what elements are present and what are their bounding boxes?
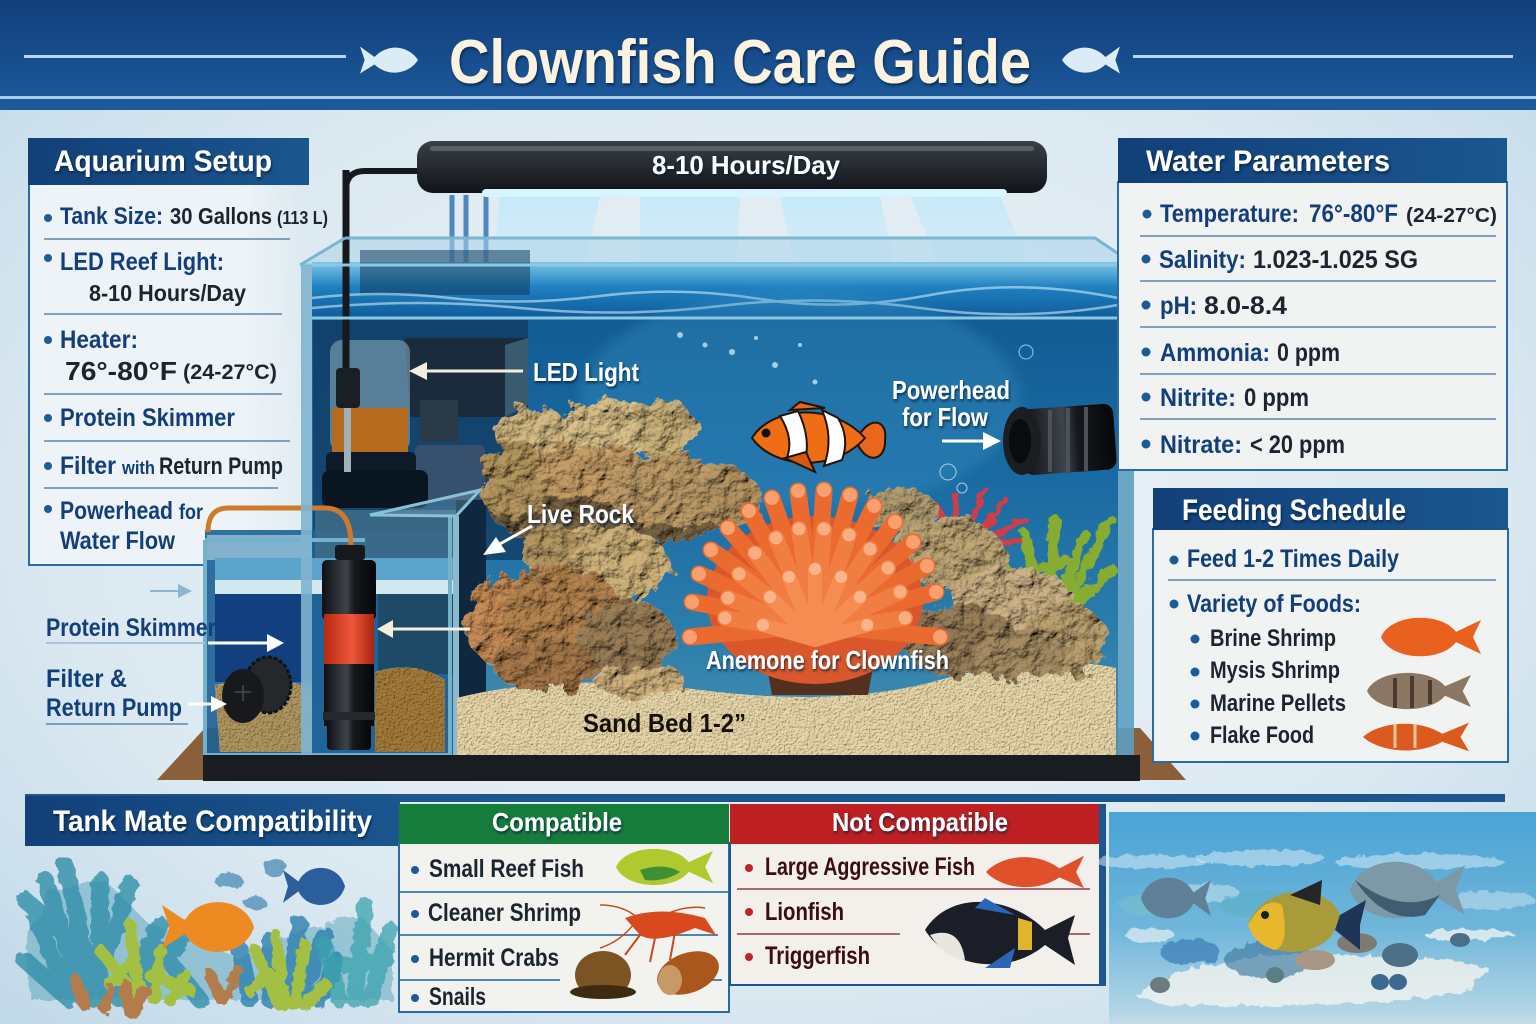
icon: snail bbox=[651, 943, 725, 1003]
parameters list: 8.0-8.4 bbox=[1204, 292, 1287, 320]
setup list: Water Flow bbox=[60, 527, 175, 555]
parameters list: (24-27°C) bbox=[1406, 205, 1497, 227]
compatible list: Hermit Crabs bbox=[429, 944, 559, 972]
return pump body bbox=[322, 545, 376, 750]
clownfish bbox=[752, 402, 885, 472]
parameters list: 76°-80°F bbox=[1309, 200, 1398, 228]
parameters list: Ammonia: bbox=[1160, 339, 1270, 367]
feeding list: Variety of Foods: bbox=[1187, 590, 1361, 618]
label: live rock: Live Rock bbox=[527, 499, 634, 529]
parameters list: Nitrite: bbox=[1160, 384, 1236, 412]
wooden table bbox=[157, 728, 1186, 780]
illustration: seascape with fish bbox=[1095, 812, 1536, 1024]
setup list: Heater: bbox=[60, 326, 138, 354]
arrow: protein skimmer bbox=[46, 634, 284, 652]
panel: tank mate heading bbox=[25, 796, 400, 846]
not compatible list: Lionfish bbox=[765, 898, 844, 926]
glass edges bbox=[300, 238, 1135, 772]
sump bbox=[205, 490, 486, 755]
feeding list: Mysis Shrimp bbox=[1210, 657, 1340, 684]
illustration: coral reef bbox=[25, 859, 392, 1012]
header banner bbox=[0, 0, 1536, 110]
setup list: with bbox=[121, 458, 155, 478]
icon: faint fish bbox=[1141, 878, 1211, 918]
icon: cleaner shrimp bbox=[600, 905, 716, 962]
icon: yellow fish bbox=[1248, 880, 1366, 952]
heading: compatible: Compatible bbox=[492, 807, 622, 837]
setup list: (24-27°C) bbox=[183, 361, 277, 384]
live rock front cluster bbox=[465, 524, 686, 698]
icon: right header fish bbox=[1062, 46, 1120, 74]
heading: not compatible: Not Compatible bbox=[832, 807, 1008, 837]
coral bbox=[925, 490, 1112, 600]
setup list: (113 L) bbox=[277, 208, 328, 228]
bubbles bbox=[677, 332, 1033, 493]
feeding list: Marine Pellets bbox=[1210, 690, 1346, 717]
callouts bbox=[46, 357, 1010, 738]
label: filter and return pump: Return Pump bbox=[46, 694, 182, 722]
icon: small reef fish bbox=[616, 849, 713, 885]
panel: not compatible bbox=[730, 804, 1106, 986]
heading: water parameters: Water Parameters bbox=[1146, 145, 1390, 178]
feeding list bbox=[1168, 545, 1496, 749]
heading: aquarium setup: Aquarium Setup bbox=[54, 145, 272, 178]
compatible list: Cleaner Shrimp bbox=[428, 899, 581, 927]
heading: feeding schedule: Feeding Schedule bbox=[1182, 494, 1406, 527]
parameters list: Nitrate: bbox=[1160, 431, 1242, 459]
heading: water parameters bbox=[1118, 138, 1507, 183]
icon: flake food fish bbox=[1363, 723, 1469, 751]
setup list: 30 Gallons bbox=[170, 203, 272, 229]
parameters list: 0 ppm bbox=[1244, 384, 1309, 412]
feeding list: Brine Shrimp bbox=[1210, 625, 1336, 652]
label: powerhead: Powerhead bbox=[892, 375, 1010, 405]
parameters list bbox=[1140, 200, 1497, 459]
compatible list: Small Reef Fish bbox=[429, 855, 584, 883]
parameters list: Temperature: bbox=[1160, 200, 1299, 228]
label: LED light: LED Light bbox=[533, 357, 639, 387]
panel: water parameters bbox=[1118, 138, 1507, 470]
pump wheel bbox=[222, 657, 291, 723]
label: powerhead bbox=[892, 375, 1010, 432]
arrow: powerhead bbox=[942, 432, 1001, 450]
setup list: Protein Skimmer bbox=[60, 404, 235, 432]
not compatible list: Triggerfish bbox=[765, 942, 870, 970]
anemone base bbox=[762, 626, 878, 695]
LED reef light fixture bbox=[417, 141, 1047, 290]
return pump hose bbox=[208, 508, 351, 545]
label: sand bed: Sand Bed 1-2” bbox=[583, 708, 746, 738]
panel: compatible bbox=[399, 804, 729, 1012]
setup list: Tank Size: bbox=[60, 203, 163, 230]
setup list: for bbox=[179, 501, 203, 524]
setup list: 8-10 Hours/Day bbox=[89, 280, 246, 306]
light label: 8-10 Hours/Day bbox=[652, 150, 841, 180]
setup list: LED Reef Light: bbox=[60, 248, 224, 276]
anemone bbox=[690, 490, 940, 684]
icon: mysis shrimp fish bbox=[1367, 673, 1471, 709]
tank stand bbox=[203, 755, 1140, 781]
heading: feeding schedule bbox=[1153, 488, 1508, 530]
panel: aquarium setup bbox=[28, 138, 328, 566]
faint arrow bbox=[150, 584, 192, 598]
setup list: Powerhead bbox=[60, 497, 173, 525]
skimmer compartment equipment bbox=[313, 170, 528, 560]
feeding list: Flake Food bbox=[1210, 722, 1314, 749]
setup list: Filter bbox=[60, 452, 116, 480]
arrow: pump bbox=[377, 620, 470, 638]
panel: feeding schedule bbox=[1153, 488, 1508, 762]
feeding list: Feed 1-2 Times Daily bbox=[1187, 545, 1399, 573]
icon: dark blue fish bbox=[283, 868, 345, 905]
tank contents bbox=[457, 400, 1117, 755]
label: filter and return pump: Filter & bbox=[46, 665, 127, 693]
setup list: 76°-80°F bbox=[65, 356, 177, 386]
aquarium tank back and water bbox=[300, 238, 1135, 755]
light power cord bbox=[346, 171, 417, 345]
sand bed bbox=[457, 662, 1116, 755]
arrow: live rock bbox=[483, 526, 532, 555]
arrow: LED light bbox=[409, 362, 523, 380]
icon: large aggressive fish bbox=[986, 856, 1084, 888]
heading: aquarium setup bbox=[28, 138, 309, 185]
powerhead bbox=[1003, 403, 1117, 476]
not compatible list bbox=[745, 853, 975, 970]
label: powerhead: for Flow bbox=[902, 402, 989, 432]
compatible list bbox=[411, 855, 584, 1011]
parameters list: < 20 ppm bbox=[1250, 431, 1345, 459]
icon: striped fish bbox=[1350, 862, 1465, 918]
parameters list: Salinity: bbox=[1159, 246, 1246, 274]
compatible list: Snails bbox=[429, 983, 486, 1011]
arrow: filter pump bbox=[188, 696, 227, 712]
top border of compatibility band bbox=[25, 794, 1505, 802]
label: filter and return pump bbox=[46, 665, 188, 724]
setup list: Return Pump bbox=[159, 453, 283, 480]
not compatible list: Large Aggressive Fish bbox=[765, 853, 975, 881]
setup list bbox=[44, 203, 328, 555]
panel: tank mate heading: Tank Mate Compatibility bbox=[53, 805, 372, 838]
label: protein skimmer: Protein Skimmer bbox=[46, 614, 216, 642]
icon: hermit crab bbox=[570, 951, 636, 999]
parameters list: pH: bbox=[1160, 292, 1197, 320]
icon: left header fish bbox=[360, 46, 418, 74]
icon: orange reef fish bbox=[162, 902, 254, 952]
pebbles bbox=[1150, 933, 1470, 993]
parameters list: 0 ppm bbox=[1277, 339, 1340, 367]
icon: brine shrimp fish bbox=[1381, 618, 1481, 656]
icon: small blue fish bbox=[214, 859, 287, 910]
title: Clownfish Care Guide bbox=[449, 28, 1031, 97]
live rock back cluster bbox=[479, 400, 1107, 679]
label: anemone: Anemone for Clownfish bbox=[706, 645, 949, 675]
icon: triggerfish bbox=[925, 898, 1075, 968]
parameters list: 1.023-1.025 SG bbox=[1253, 246, 1418, 274]
